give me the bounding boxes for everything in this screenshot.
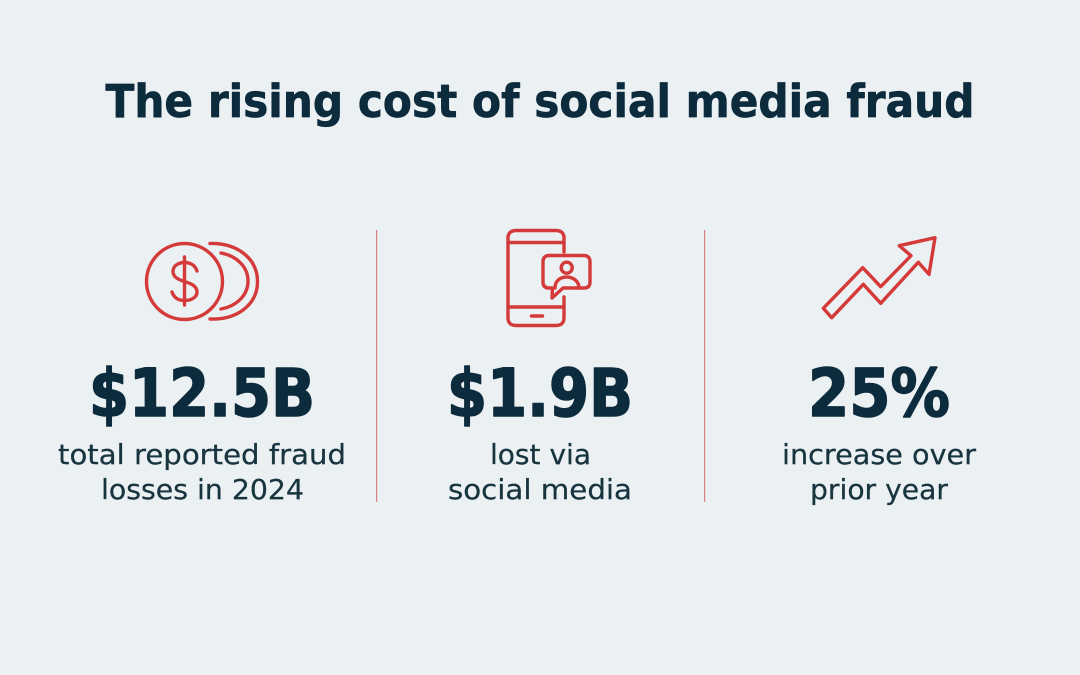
icon: stacked dollar coins <box>146 243 258 320</box>
label: lost via social media: social media <box>448 473 632 506</box>
stat: 25%: 25% <box>808 355 950 432</box>
label: increase over prior year: prior year <box>810 473 948 506</box>
divider right <box>704 230 705 502</box>
divider left <box>376 230 377 502</box>
panel: increase over prior year <box>782 238 976 506</box>
icon: phone with chat bubble <box>508 230 590 326</box>
label: increase over prior year: increase over <box>782 438 976 471</box>
panel: lost via social media <box>447 230 633 506</box>
label: increase over prior year <box>782 438 976 506</box>
label: total reported fraud losses in 2024 <box>58 438 346 506</box>
label: total reported fraud losses in 2024: total reported fraud <box>58 438 346 471</box>
label: lost via social media <box>448 438 632 506</box>
label: lost via social media: lost via <box>490 438 591 471</box>
title: The rising cost of social media fraud <box>106 75 974 128</box>
panel: total reported fraud losses <box>58 243 346 506</box>
stat: $12.5B: $12.5B <box>89 355 315 432</box>
stat: $1.9B: $1.9B <box>447 355 633 432</box>
icon: rising zigzag arrow <box>823 238 935 318</box>
label: total reported fraud losses in 2024: losses in 2024 <box>101 473 304 506</box>
